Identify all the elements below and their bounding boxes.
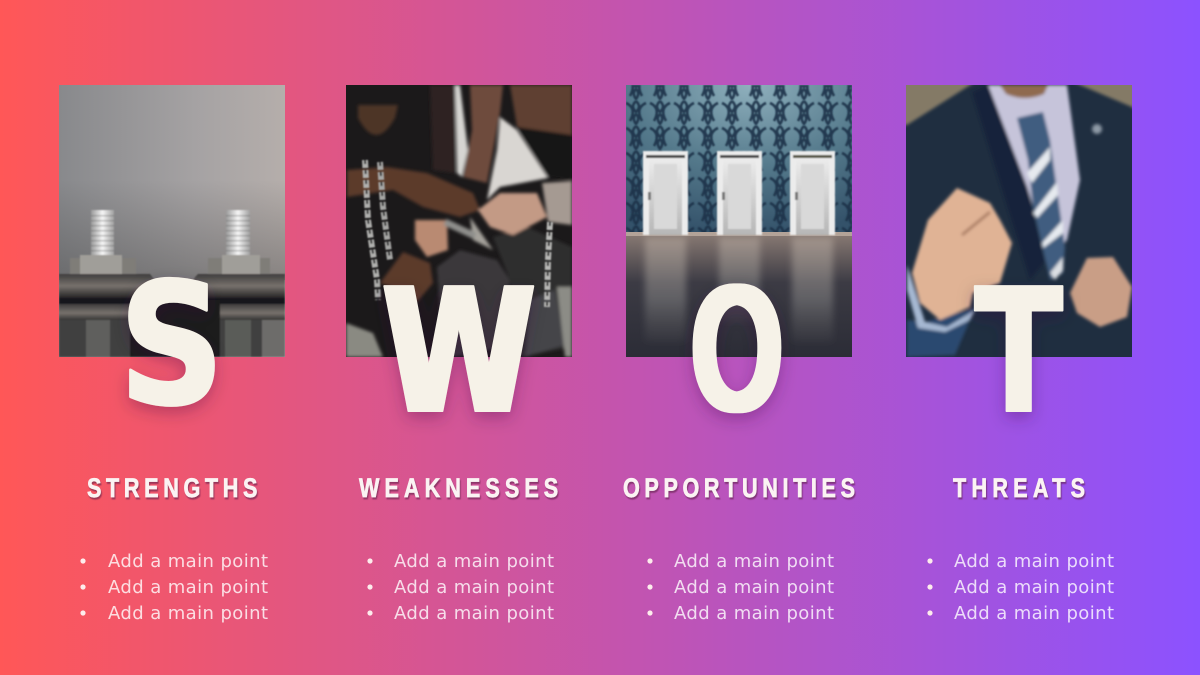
- heading: strengths: STRENGTHS: [87, 474, 257, 504]
- bullet list: strengths: [80, 551, 268, 624]
- bullet list: strengths: Add a main point: [108, 551, 268, 572]
- panel: opportunities photo of three doors: [626, 85, 852, 357]
- letter O: O: [691, 246, 783, 450]
- letter T: T: [974, 251, 1063, 451]
- letter S: S: [119, 248, 224, 444]
- bullet list: weaknesses: Add a main point: [394, 577, 554, 598]
- bullet list: weaknesses: Add a main point: [394, 551, 554, 572]
- bullet list: opportunities: Add a main point: [674, 551, 834, 572]
- bullet list: threats: Add a main point: [954, 577, 1114, 598]
- bullet list: strengths: Add a main point: [108, 577, 268, 598]
- bullet list: threats: [927, 551, 1114, 624]
- letter W: W: [382, 252, 536, 452]
- heading: threats: THREATS: [953, 474, 1085, 504]
- bullet list: threats: Add a main point: [954, 603, 1114, 624]
- panel: weaknesses photo of chained hands: [346, 85, 572, 357]
- panel: strengths photo of weights: [59, 85, 285, 357]
- heading: weaknesses: WEAKNESSES: [359, 474, 558, 504]
- bullet list: opportunities: Add a main point: [674, 577, 834, 598]
- bullet list: strengths: Add a main point: [108, 603, 268, 624]
- panel: threats photo of businessman: [903, 82, 1135, 357]
- bullet list: opportunities: Add a main point: [674, 603, 834, 624]
- heading: opportunities: OPPORTUNITIES: [623, 474, 855, 504]
- bullet list: weaknesses: Add a main point: [394, 603, 554, 624]
- bullet list: threats: Add a main point: [954, 551, 1114, 572]
- bullet list: weaknesses: [367, 551, 554, 624]
- bullet list: opportunities: [647, 551, 834, 624]
